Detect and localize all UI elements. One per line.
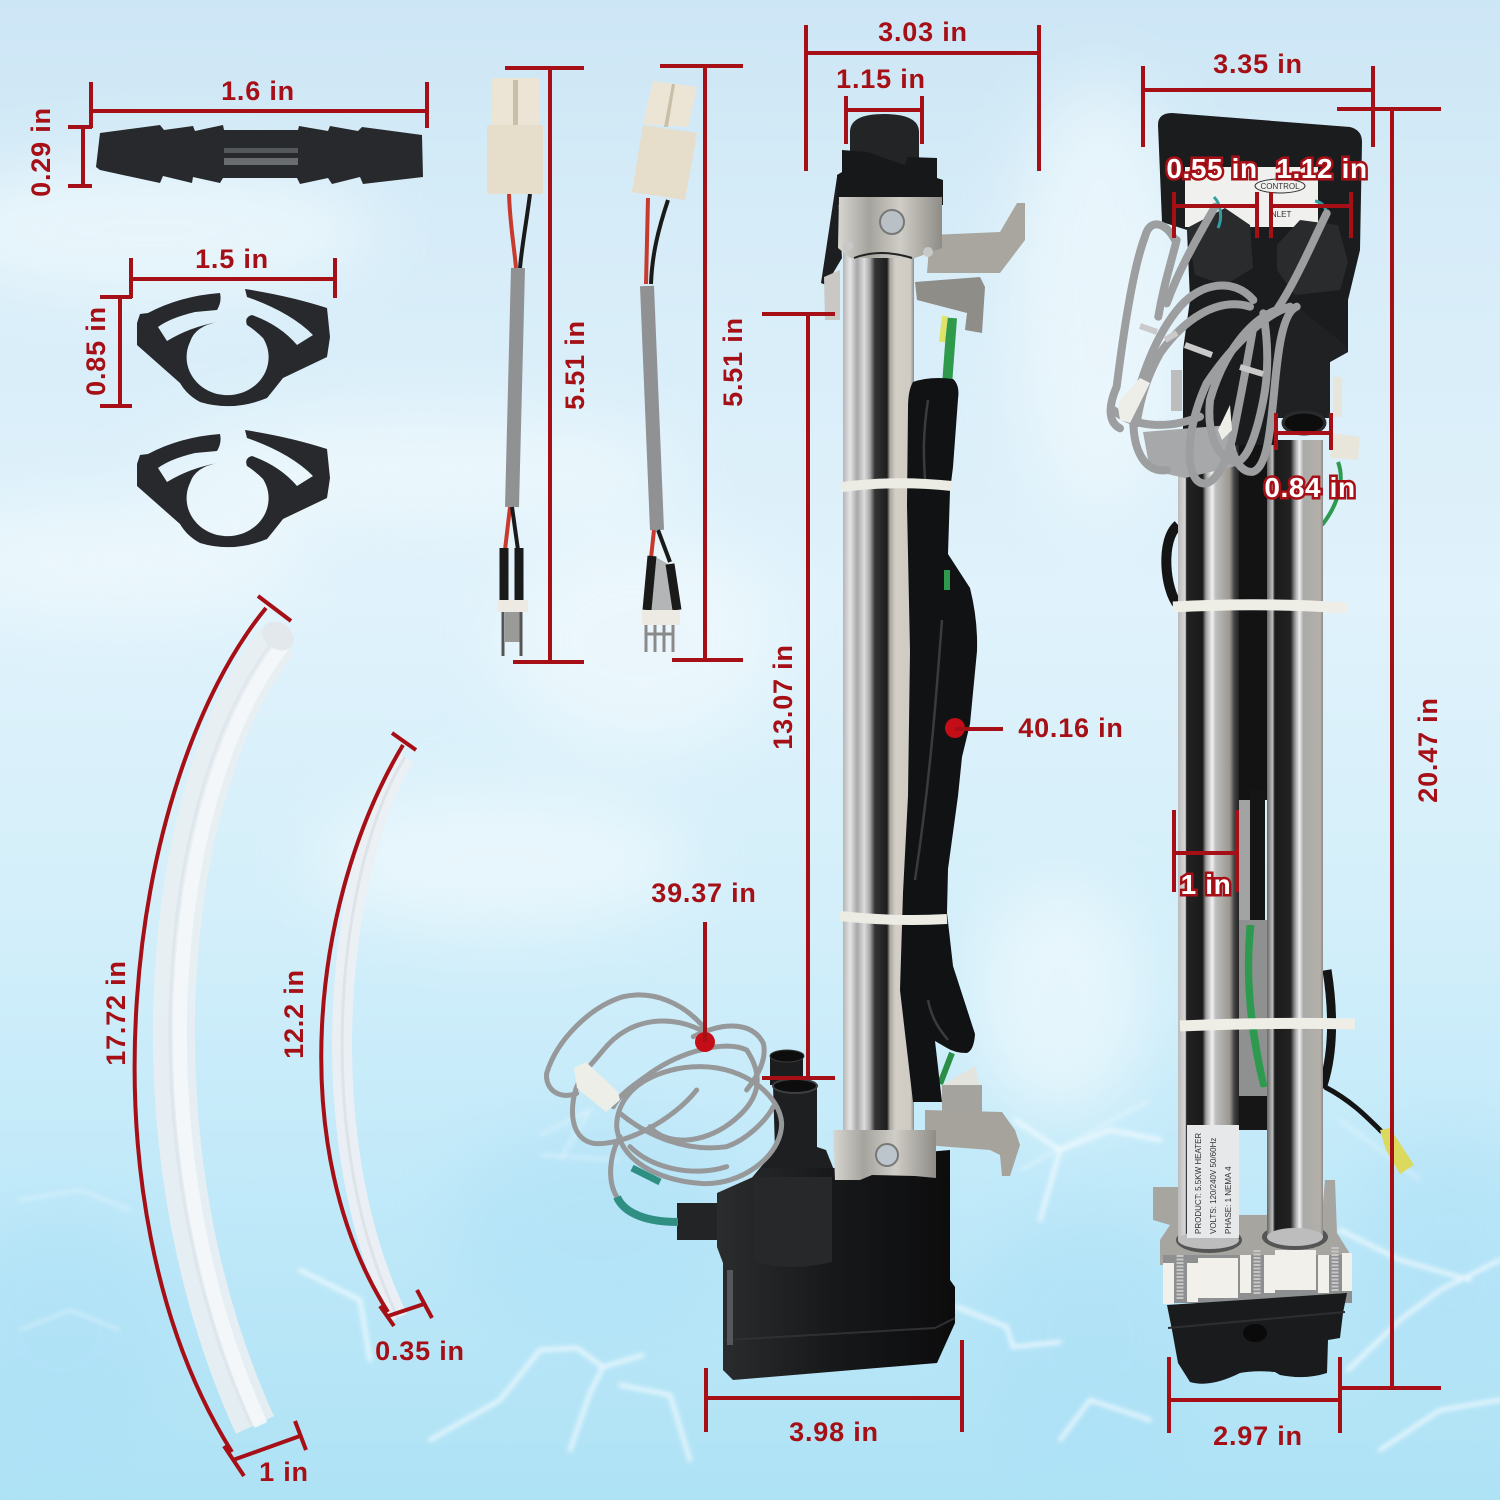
dimension: 0.55 in: 0.55 in bbox=[1166, 153, 1258, 184]
dimension: cable 5.51 in right: 5.51 in bbox=[718, 317, 748, 407]
side connector bbox=[677, 1203, 717, 1240]
cable ties bbox=[840, 483, 952, 920]
rear mounting plate bbox=[821, 177, 842, 285]
dimension: 1 in tube bbox=[1174, 810, 1237, 900]
top cap bbox=[850, 114, 919, 165]
cable ties on bundle bbox=[1140, 326, 1263, 374]
dimension: 0.85 in bbox=[81, 297, 132, 406]
dimension: 3.35 in: 3.35 in bbox=[1213, 49, 1303, 79]
lower bracket bbox=[925, 1110, 1020, 1176]
callout: 39.37 in: 39.37 in bbox=[651, 878, 757, 908]
callout: 40.16 in: 40.16 in bbox=[1018, 713, 1124, 743]
dimension: 12.2 in arc bbox=[279, 733, 416, 1312]
dimension: 13.07 in bbox=[762, 314, 835, 1078]
dimension: 1 in tube: 1 in bbox=[1181, 869, 1231, 900]
stainless tube bbox=[843, 250, 914, 1135]
dimension: cable 5.51 in right bbox=[660, 66, 748, 660]
black cables at tube sides bbox=[1166, 525, 1382, 1132]
dimension: 2.97 in bbox=[1169, 1357, 1340, 1451]
dimension: 13.07 in: 13.07 in bbox=[768, 644, 798, 750]
white cable plug bbox=[574, 1062, 620, 1112]
spec label on tube: PHASE: 1 NEMA 4 bbox=[1224, 1166, 1233, 1234]
dimension: 0.29 in: 0.29 in bbox=[26, 107, 56, 197]
bottom flange bbox=[1153, 1180, 1352, 1303]
hose clip, upper bbox=[137, 289, 330, 406]
stainless tubes bbox=[1178, 440, 1323, 1249]
callout: 39.37 in bbox=[651, 878, 757, 1052]
teal wire ends bbox=[1214, 197, 1326, 228]
spec label on tube bbox=[1187, 1125, 1239, 1238]
dimension: 2.97 in: 2.97 in bbox=[1213, 1421, 1303, 1451]
dimension: 17.72 in arc bbox=[101, 596, 291, 1452]
spec label on tube: VOLTS: 120/240V 50/60Hz bbox=[1209, 1138, 1218, 1234]
black power cables bbox=[900, 378, 977, 1102]
white cable plugs bbox=[1118, 378, 1232, 440]
dimension: 0.29 in bbox=[26, 107, 92, 197]
white label bbox=[1185, 167, 1318, 227]
dimension: 20.47 in: 20.47 in bbox=[1413, 697, 1443, 803]
dimension: 1.12 in: 1.12 in bbox=[1276, 153, 1368, 184]
dimension: 1 in large tube: 1 in bbox=[259, 1457, 309, 1487]
hose clip, lower bbox=[137, 430, 330, 547]
dimension: 3.03 in: 3.03 in bbox=[878, 17, 968, 47]
dimension: 1.12 in bbox=[1271, 153, 1368, 238]
black hose and wiring between tubes bbox=[1232, 440, 1268, 1130]
dimension: cable 5.51 in left bbox=[505, 68, 590, 662]
dimension: 0.55 in bbox=[1166, 153, 1258, 238]
elbow outlet bbox=[1277, 306, 1348, 434]
dimension: 1.6 in bbox=[91, 76, 427, 128]
clear tube, large bbox=[170, 616, 299, 1425]
screw and bracket bbox=[1143, 370, 1240, 478]
barbed hose connector bbox=[96, 125, 423, 184]
yellow terminal bbox=[1380, 1128, 1414, 1174]
teal ground wire bbox=[617, 1168, 678, 1222]
grey sensor cable bundle bbox=[1111, 207, 1327, 484]
dimension: 0.84 in bbox=[1264, 413, 1356, 503]
lower clamp bbox=[833, 1130, 936, 1180]
dimension: 17.72 in arc: 17.72 in bbox=[101, 960, 131, 1066]
union nuts bbox=[1187, 208, 1348, 295]
black body bbox=[717, 1150, 955, 1380]
green wire top bbox=[1322, 462, 1341, 525]
clear tube, small bbox=[342, 757, 405, 1318]
dimension: 3.98 in: 3.98 in bbox=[789, 1417, 879, 1447]
dimension: 3.03 in bbox=[806, 17, 1039, 171]
top plate and rear body bbox=[1158, 113, 1362, 445]
dimension: 0.35 in bbox=[375, 1290, 465, 1366]
dimension: 12.2 in arc: 12.2 in bbox=[279, 969, 309, 1059]
dimension: 1.5 in bbox=[131, 244, 335, 298]
dimension: 20.47 in bbox=[1337, 109, 1443, 1388]
white label: INLET bbox=[1269, 210, 1291, 219]
dimension: 1.15 in bbox=[836, 64, 926, 144]
top clamp bbox=[838, 197, 942, 258]
top block bbox=[837, 150, 943, 205]
screws bbox=[1180, 1247, 1335, 1300]
terminal block bbox=[1330, 377, 1360, 460]
dimension: 1.5 in: 1.5 in bbox=[195, 244, 269, 274]
dimension: 1.15 in: 1.15 in bbox=[836, 64, 926, 94]
dimension: 0.84 in: 0.84 in bbox=[1264, 472, 1356, 503]
dimension: 1 in large tube bbox=[224, 1421, 309, 1487]
sensor cable, left bbox=[487, 78, 543, 656]
heater, side view bbox=[547, 114, 1025, 1380]
grey sensor cable bundle bbox=[547, 995, 782, 1197]
inlet stubs bbox=[750, 1050, 838, 1180]
sensor cable, right bbox=[632, 81, 697, 652]
dimension: 0.35 in: 0.35 in bbox=[375, 1336, 465, 1366]
dimension: 1.6 in: 1.6 in bbox=[221, 76, 295, 106]
black manifold bbox=[1167, 1293, 1347, 1384]
spec label on tube: PRODUCT: 5.5KW HEATER bbox=[1194, 1133, 1203, 1234]
cable ties bbox=[1173, 605, 1355, 1026]
dimension: cable 5.51 in left: 5.51 in bbox=[560, 320, 590, 410]
white label: CONTROL bbox=[1260, 182, 1300, 191]
upper brackets bbox=[915, 203, 1025, 333]
callout: 40.16 in bbox=[945, 713, 1124, 743]
dimension: 3.98 in bbox=[706, 1340, 962, 1447]
white spacers bbox=[1163, 1250, 1352, 1304]
dimension: 0.85 in: 0.85 in bbox=[81, 306, 111, 396]
dimension: 3.35 in bbox=[1143, 49, 1373, 147]
green ground wire bbox=[942, 316, 952, 385]
heater, rear view bbox=[1111, 113, 1414, 1384]
green wire bottom bbox=[940, 1053, 952, 1084]
